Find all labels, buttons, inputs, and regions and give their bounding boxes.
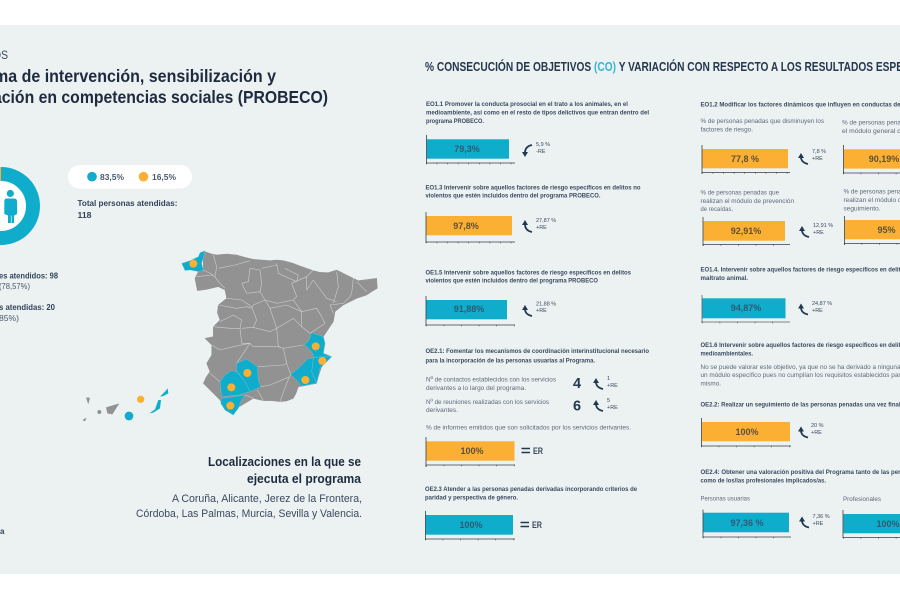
risk factors chart: 7,8 %: [812, 149, 826, 155]
users chart: [700, 495, 830, 538]
professionals chart: Profesionales: [843, 496, 882, 503]
panel: OE2.1: OE2.1: Fomentar los mecanismos de coordinación interinstitucional necesario: [426, 348, 649, 355]
locations heading: Localizaciones en la que se: [208, 455, 361, 469]
donut chart: gender share: [0, 174, 33, 238]
panel: OE2.2: 20 %: [811, 423, 824, 429]
panel: OE2.1: para la incorporación de las personas usuarias al Programa.: [426, 357, 595, 364]
users chart: 97,36 %: [730, 518, 764, 528]
meetings stat: [426, 398, 618, 414]
relapse prevention chart: 12,91 %: [813, 223, 833, 229]
professionals chart: [842, 496, 900, 538]
women attended stat: s atendidas: 20: [0, 303, 56, 312]
panel: EO1.1: 79,3%: [454, 144, 480, 154]
risk factors chart: % de personas penadas que disminuyen los: [700, 118, 825, 125]
contacts stat: derivantes a lo largo del programa.: [426, 385, 526, 392]
panel: OE1.6: mismo.: [700, 380, 721, 387]
general module chart: el módulo general d: [842, 128, 900, 135]
panel: OE1.5: 91,88%: [454, 304, 484, 314]
panel: OE1.6: medioambientales.: [700, 350, 753, 357]
panel: OE2.3: 100%: [459, 520, 483, 530]
highlighted provinces: [182, 251, 332, 415]
risk factors chart: factores de riesgo.: [700, 127, 753, 134]
legend pill: 16,5%: [152, 172, 176, 182]
meetings stat: 6: [573, 398, 581, 414]
general module chart: 90,19%: [869, 154, 899, 164]
locations heading: [208, 455, 362, 486]
panel: EO1.4: 94,87%: [731, 303, 761, 313]
panel: OE1.5: +RE: [536, 308, 547, 314]
panel: OE2.3: paridad y perspectiva de género.: [425, 494, 518, 501]
relapse prevention chart: % de personas penadas que: [700, 189, 779, 196]
icon: person: [4, 190, 17, 223]
panel: OE2.3: [425, 486, 637, 540]
location markers: [189, 260, 326, 410]
panel: EO1.1: [426, 101, 649, 164]
title: ma de intervención, sensibilización y: [0, 66, 276, 86]
panel: OE2.2: 100%: [735, 427, 759, 437]
relapse prevention chart: realizan el módulo de prevención: [700, 198, 794, 205]
total attended: Total personas atendidas:: [78, 198, 178, 208]
risk factors chart: +RE: [812, 156, 823, 162]
follow-up module chart: [844, 189, 900, 245]
panel: OE2.2: +RE: [811, 430, 822, 436]
risk factors chart: [700, 118, 826, 174]
users chart: Personas usuarias: [700, 495, 751, 502]
panel: EO1.1: programa PROBECO.: [426, 118, 484, 125]
legend pill: [68, 165, 192, 188]
panel: EO1.1: -RE: [536, 149, 546, 155]
panel: EO1.4: 24,87 %: [812, 301, 832, 307]
panel: EO1.2: [700, 102, 900, 246]
panel: EO1.1: medioambiente, así como en el resto de tipos delictivos que entran dentro del: [426, 110, 649, 117]
panel: OE2.4: como de los/las profesionales implicados/as.: [700, 478, 826, 485]
panel: EO1.1: EO1.1 Promover la conducta prosocial en el trato a los animales, en el: [426, 101, 628, 108]
meetings stat: 5: [607, 398, 610, 404]
relapse prevention chart: de recaídas.: [700, 206, 733, 213]
panel: EO1.3: +RE: [536, 225, 547, 231]
panel: EO1.3: violentos que estén incluidos dentro del programa PROBECO.: [426, 193, 601, 200]
panel: EO1.3: EO1.3 Intervenir sobre aquellos factores de riesgo específicos en delitos no: [426, 184, 640, 191]
panel: OE2.2: [700, 401, 900, 447]
meetings stat: derivantes.: [426, 407, 458, 414]
panel: OE2.3: OE2.3 Atender a las personas penadas derivadas incorporando criterios de: [425, 486, 637, 493]
locations list: A Coruña, Alicante, Jerez de la Frontera,: [172, 493, 362, 505]
panel: EO1.1: 5,9 %: [536, 142, 550, 148]
relapse prevention chart: [700, 189, 833, 246]
map: Canary Islands: [82, 388, 168, 421]
relapse prevention chart: +RE: [813, 230, 824, 236]
professionals chart: 100%: [876, 519, 900, 529]
men attended stat: es atendidos: 98: [0, 272, 59, 280]
panel: OE1.5: 21,88 %: [536, 302, 556, 308]
title: ación en competencias sociales (PROBECO): [0, 87, 328, 107]
panel: EO1.3: [426, 184, 640, 243]
clipped footer word: a: [0, 527, 5, 536]
users chart: +RE: [812, 521, 824, 527]
panel: OE1.6: [700, 342, 900, 387]
panel: OE2.1: % de informes emitidos que son solicitados por los servicios derivantes.: [426, 424, 631, 431]
follow-up module chart: seguimiento.: [844, 206, 881, 213]
men attended stat: [0, 272, 59, 291]
panel: OE1.5: [426, 269, 631, 326]
relapse prevention chart: 92,91%: [731, 226, 761, 236]
panel: EO1.4: maltrato animal.: [700, 275, 748, 282]
panel: EO1.3: 27,87 %: [536, 218, 556, 224]
contacts stat: 1: [607, 376, 610, 382]
panel: OE2.1: ER: [533, 446, 543, 456]
panel: OE1.5: violentos que estén incluidos dentro del programa PROBECO: [426, 278, 598, 285]
general module chart: [842, 120, 900, 174]
panel: OE1.5: OE1.5 Intervenir sobre aquellos factores de riesgo específicos en delitos: [426, 269, 631, 276]
contacts stat: +RE: [607, 383, 618, 389]
contacts stat: 4: [573, 376, 581, 392]
panel: OE2.1: 100%: [460, 446, 484, 456]
follow-up module chart: 95%: [877, 225, 896, 235]
panel: OE2.3: ER: [532, 520, 542, 530]
locations list: [136, 493, 362, 520]
contacts stat: [426, 376, 618, 392]
legend pill: 83,5%: [100, 172, 124, 182]
title: [0, 66, 328, 107]
locations list: Córdoba, Las Palmas, Murcia, Sevilla y Valencia.: [136, 508, 362, 520]
peninsula: [195, 252, 377, 415]
total attended: 118: [78, 210, 92, 220]
meetings stat: Nº de reuniones realizadas con los servicios: [426, 399, 550, 406]
panel: EO1.3: 97,8%: [453, 221, 479, 231]
total attended: [78, 198, 178, 220]
users chart: 7,36 %: [812, 514, 830, 520]
panel: EO1.4: +RE: [812, 308, 823, 314]
map: Spain: [182, 251, 377, 415]
risk factors chart: 77,8 %: [731, 154, 759, 164]
contacts stat: Nº de contactos establecidos con los servicios: [426, 377, 557, 384]
locations heading: ejecuta el programa: [247, 472, 362, 486]
panel: OE2.1: [426, 348, 649, 467]
meetings stat: +RE: [607, 405, 618, 411]
panel: EO1.4: [700, 267, 900, 323]
women attended stat: [0, 303, 56, 323]
panel: OE2.4: [700, 469, 900, 538]
